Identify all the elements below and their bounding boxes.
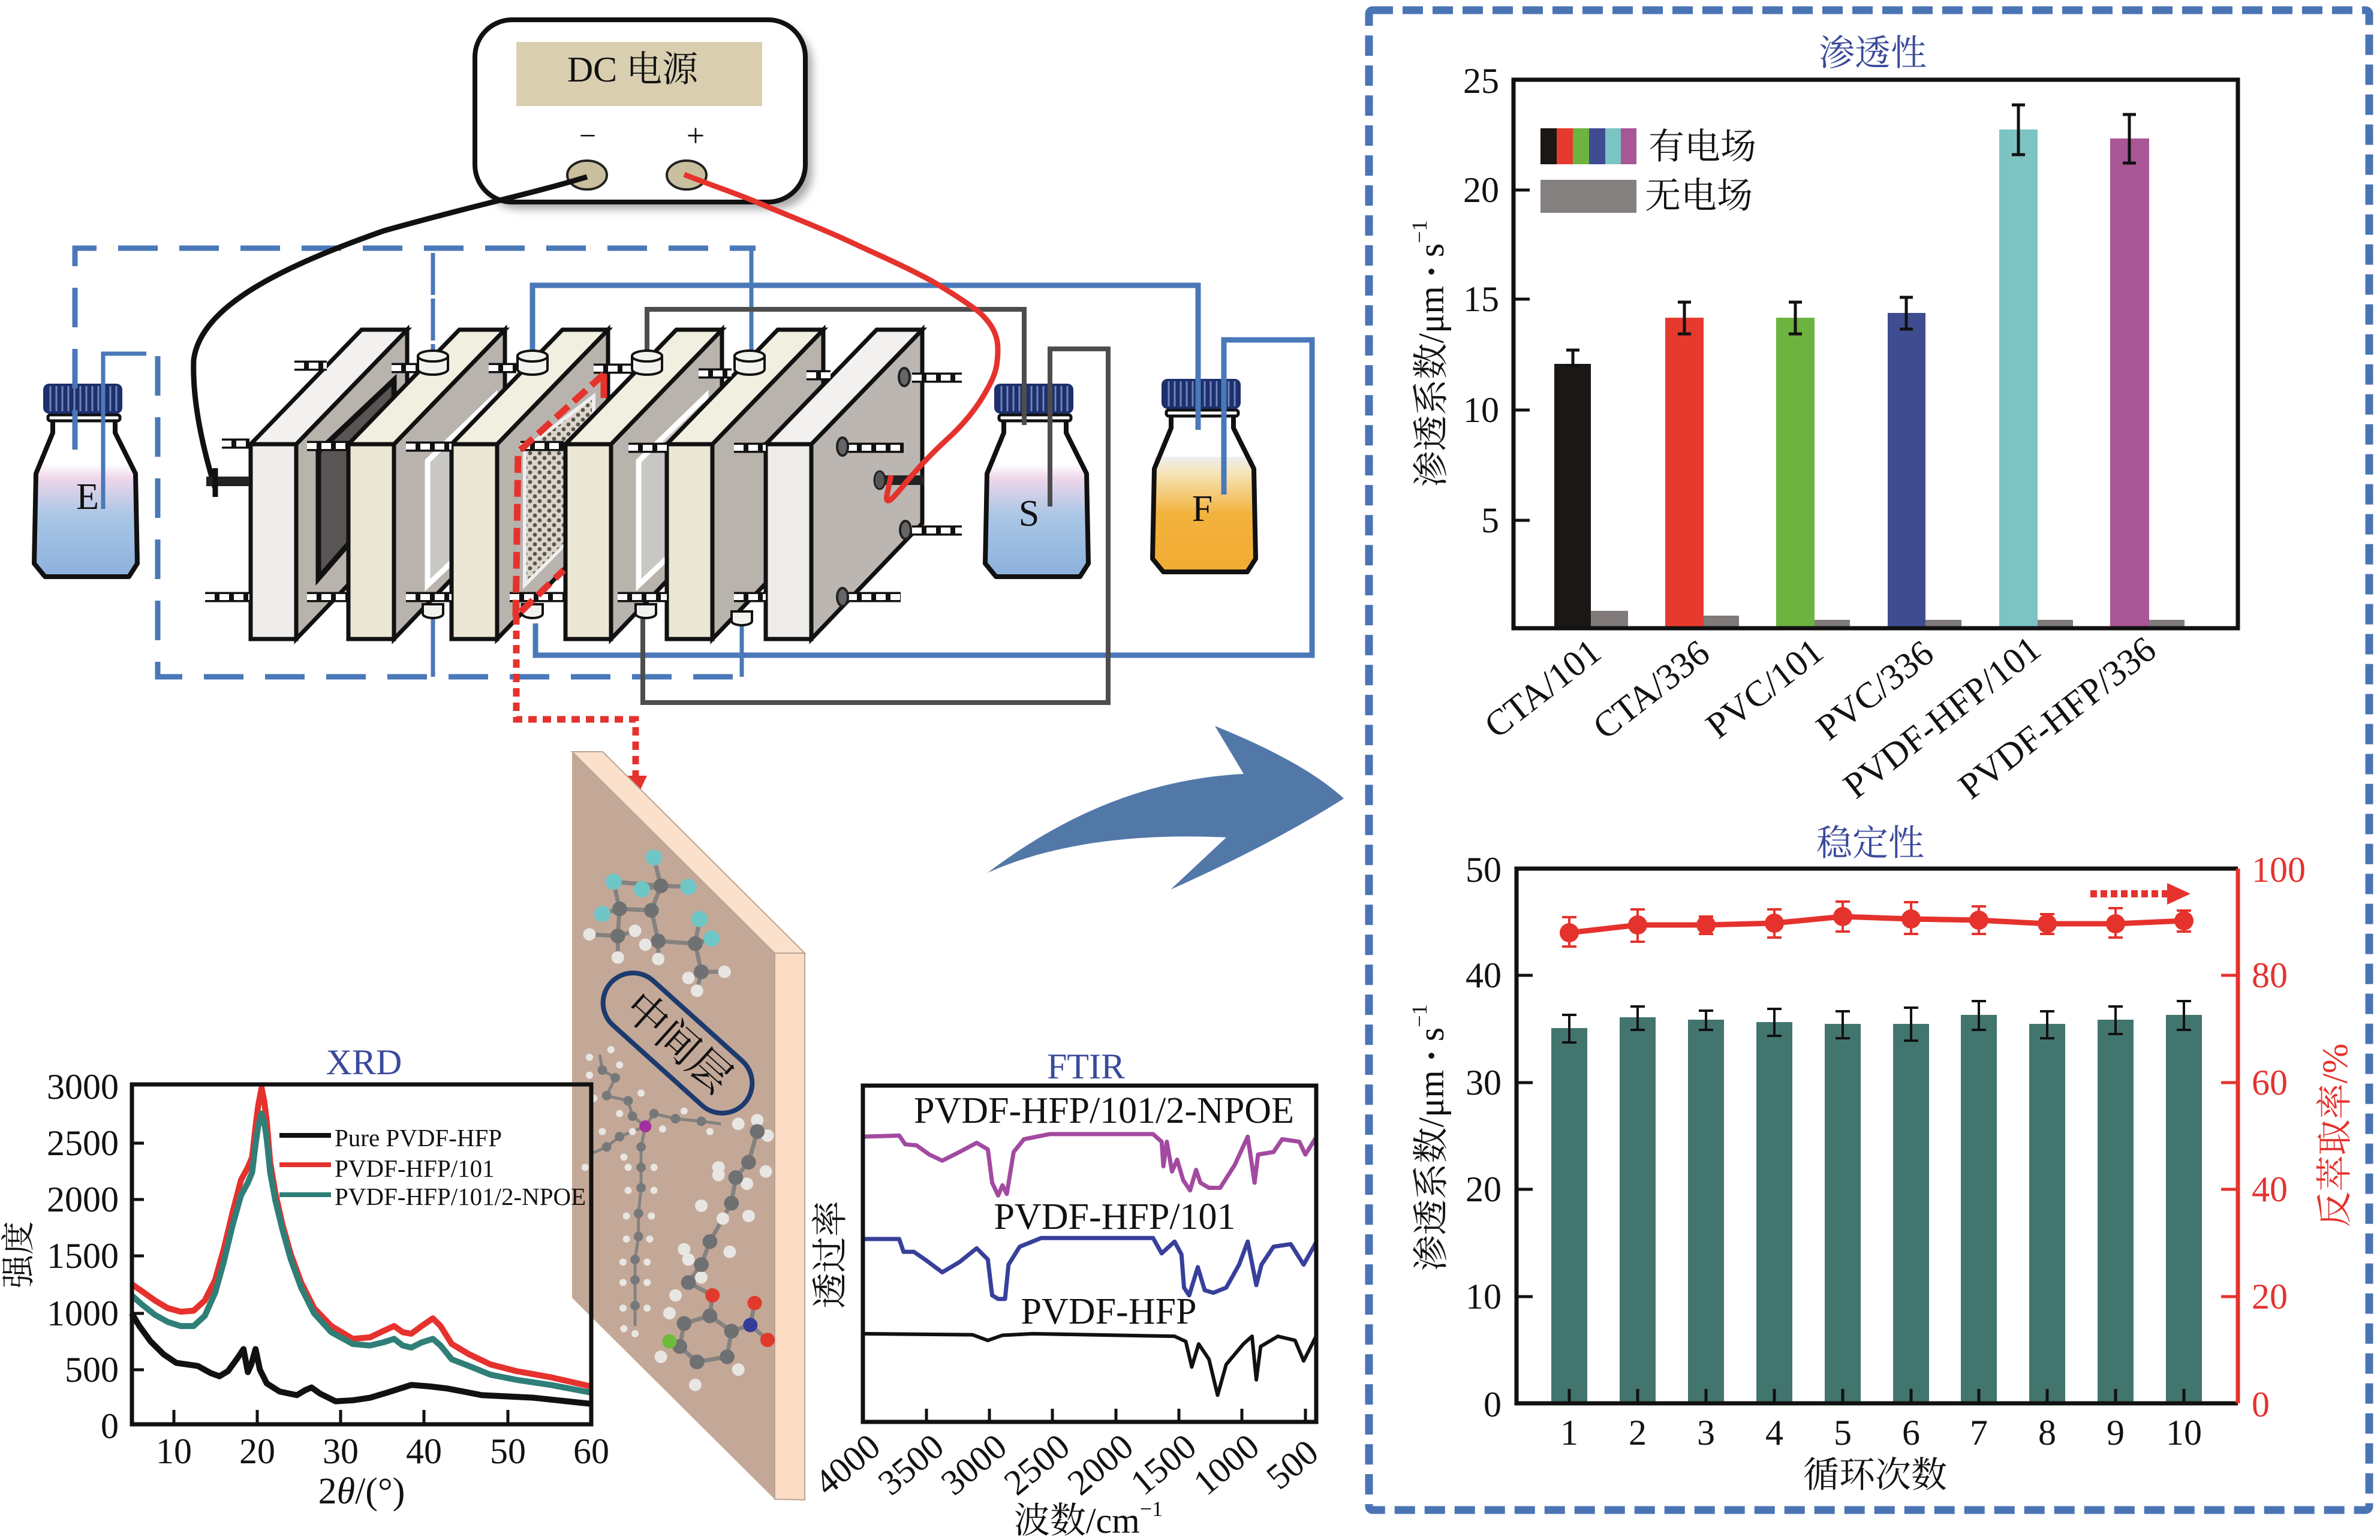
plate 4 xyxy=(565,330,722,639)
XRD x axis title: 2θ/(°) xyxy=(318,1471,405,1512)
x axis title: 循环次数 xyxy=(1803,1455,1947,1495)
XRD legend: PVDF-HFP/101 xyxy=(335,1155,495,1182)
permeability legend: 无电场 xyxy=(1645,176,1753,216)
stability title: 稳定性 xyxy=(1816,824,1924,863)
FTIR x axis title: −1 xyxy=(1140,1497,1163,1521)
XRD legend: Pure PVDF-HFP xyxy=(335,1124,502,1152)
molecule: PVDF-HFP xyxy=(583,849,731,997)
bolts xyxy=(205,366,962,597)
permeability x labels: PVC/101 xyxy=(1699,631,1831,746)
plate 1 xyxy=(251,330,407,639)
FTIR spectrum labels: PVDF-HFP/101/2-NPOE xyxy=(914,1090,1294,1131)
permeability legend xyxy=(1540,127,1756,216)
DC power supply: + xyxy=(687,117,705,153)
bottle E xyxy=(34,384,137,577)
FTIR spectrum labels: PVDF-HFP/101 xyxy=(994,1197,1236,1237)
x tick labels: 3 xyxy=(1697,1413,1715,1452)
XRD x tick labels: 60 xyxy=(573,1431,609,1471)
plate 6 xyxy=(766,330,922,639)
x tick labels: 8 xyxy=(2038,1413,2056,1452)
bottle F xyxy=(1153,379,1256,572)
FTIR x tick labels: 2000 xyxy=(1060,1426,1141,1503)
extraction line with markers xyxy=(1560,902,2194,947)
x tick labels: 5 xyxy=(1834,1413,1852,1452)
permeability x labels: CTA/101 xyxy=(1477,631,1609,746)
port connectors xyxy=(418,351,765,625)
x tick labels: 4 xyxy=(1765,1413,1783,1452)
right y tick labels: 0 xyxy=(2252,1385,2270,1424)
permeability y tick labels: 5 xyxy=(1481,501,1499,540)
XRD y axis title: 强度 xyxy=(1,1221,38,1288)
FTIR y axis title: 透过率 xyxy=(811,1201,850,1309)
bars without field xyxy=(1591,611,2185,628)
right y axis title: 反萃取率/% xyxy=(2315,1044,2355,1227)
FTIR x axis title: 波数/cm xyxy=(1014,1501,1140,1540)
x tick labels: 10 xyxy=(2166,1413,2202,1452)
FTIR x tick labels: 3000 xyxy=(934,1426,1014,1503)
FTIR spectrum labels xyxy=(914,1090,1294,1332)
XRD y tick labels: 1500 xyxy=(47,1236,119,1276)
XRD chart xyxy=(1,1042,609,1512)
permeability bars by cycle xyxy=(1551,1015,2202,1403)
permeability x labels: PVDF-HFP/101 xyxy=(1836,629,2048,806)
XRD x tick labels: 10 xyxy=(156,1431,192,1471)
FTIR axes xyxy=(863,1086,1316,1422)
FTIR x tick labels: 2500 xyxy=(997,1426,1077,1503)
permeability y tick labels: 15 xyxy=(1463,279,1499,319)
XRD y tick labels: 0 xyxy=(101,1406,119,1446)
x tick labels: 9 xyxy=(2107,1413,2125,1452)
FTIR spectra xyxy=(863,1134,1317,1395)
DC power supply: − xyxy=(579,119,596,152)
right y tick labels: 20 xyxy=(2252,1277,2288,1316)
FTIR chart xyxy=(807,1047,1326,1540)
permeability axes xyxy=(1514,80,2238,628)
big blue curved arrow xyxy=(988,726,1344,890)
error bars xyxy=(1566,105,2136,366)
FTIR x tick labels: 1500 xyxy=(1123,1426,1203,1503)
tubing: electrolyte dashed loop xyxy=(75,248,756,677)
XRD y tick labels: 500 xyxy=(65,1350,119,1390)
FTIR x tick labels: 3500 xyxy=(871,1426,951,1503)
FTIR x tick labels xyxy=(807,1426,1326,1503)
permeability x labels: CTA/336 xyxy=(1585,632,1717,748)
permeability x labels xyxy=(1477,629,2164,807)
tubing: feed solid loop xyxy=(532,285,1312,655)
left y tick labels: 10 xyxy=(1466,1277,1502,1316)
permeability bar chart xyxy=(1407,34,2238,807)
bolt heads xyxy=(837,368,911,606)
permeability title: 渗透性 xyxy=(1819,34,1927,73)
XRD curves xyxy=(132,1088,591,1404)
left y tick labels: 40 xyxy=(1466,956,1502,995)
red positive wire xyxy=(684,174,998,501)
XRD y tick labels xyxy=(47,1067,119,1446)
x tick labels: 1 xyxy=(1560,1413,1578,1452)
right y tick labels: 40 xyxy=(2252,1170,2288,1209)
plate 2 xyxy=(348,330,505,639)
XRD y tick labels: 3000 xyxy=(47,1067,119,1107)
permeability y tick labels xyxy=(1463,61,1499,540)
FTIR spectrum labels: PVDF-HFP xyxy=(1021,1291,1196,1332)
right y tick labels: 100 xyxy=(2252,850,2306,890)
XRD x tick labels: 50 xyxy=(490,1431,526,1471)
permeability y axis title: 渗透系数/μm·s xyxy=(1412,243,1451,487)
molecule: 2-NPOE xyxy=(655,1114,775,1391)
right dashed panel xyxy=(1369,10,2369,1510)
XRD x tick labels xyxy=(156,1431,609,1471)
x tick labels xyxy=(1560,1413,2202,1452)
right y tick labels: 60 xyxy=(2252,1063,2288,1102)
plate 3 with membrane xyxy=(452,330,608,639)
bars with field xyxy=(1554,129,2149,628)
left y tick labels: 30 xyxy=(1466,1063,1502,1102)
permeability legend: 有电场 xyxy=(1648,127,1756,167)
left diagram: membrane stack setup xyxy=(34,20,1312,798)
FTIR title: FTIR xyxy=(1047,1047,1125,1086)
membrane module stack xyxy=(205,330,962,639)
right y tick labels: 80 xyxy=(2252,956,2288,995)
molecule: ionic liquid carrier xyxy=(582,1046,721,1337)
red dashed outline around membrane xyxy=(516,374,604,617)
XRD y tick labels: 1000 xyxy=(47,1294,119,1333)
XRD y tick labels: 2000 xyxy=(47,1180,119,1219)
FTIR x tick labels: 500 xyxy=(1259,1432,1326,1497)
x tick labels: 2 xyxy=(1629,1413,1647,1452)
FTIR x tick labels: 1000 xyxy=(1186,1426,1266,1503)
bottle E: E xyxy=(76,477,99,517)
plate 5 xyxy=(667,330,823,639)
red dotted arrow to right axis xyxy=(2090,883,2191,905)
XRD legend xyxy=(279,1124,586,1210)
permeability y tick labels: 10 xyxy=(1463,390,1499,430)
permeability y tick labels: 25 xyxy=(1463,61,1499,101)
bottle S xyxy=(985,384,1088,577)
stability chart xyxy=(1407,824,2355,1495)
permeability y axis title: −1 xyxy=(1407,220,1431,243)
permeability x labels: PVC/336 xyxy=(1809,633,1941,748)
tubing: strip gray loop xyxy=(643,309,1108,703)
bar error bars xyxy=(1562,1001,2191,1042)
right y tick labels xyxy=(2252,850,2306,1424)
XRD title: XRD xyxy=(326,1042,402,1082)
permeability y tick labels: 20 xyxy=(1463,170,1499,210)
XRD x tick labels: 30 xyxy=(323,1431,359,1471)
interlayer panel xyxy=(572,752,805,1500)
FTIR x tick labels: 4000 xyxy=(807,1426,887,1503)
permeability x labels: PVDF-HFP/336 xyxy=(1951,629,2164,807)
left y tick labels: 50 xyxy=(1466,850,1502,890)
interlayer label: 中间层 xyxy=(615,984,740,1102)
x tick labels: 6 xyxy=(1902,1413,1920,1452)
XRD x tick labels: 40 xyxy=(406,1431,442,1471)
interlayer label xyxy=(591,960,765,1126)
bottle S: S xyxy=(1019,493,1039,534)
left y tick labels xyxy=(1466,850,1502,1424)
stability axes xyxy=(1517,869,2238,1403)
left y axis title: −1 xyxy=(1407,1004,1431,1027)
x tick labels: 7 xyxy=(1970,1413,1988,1452)
left y tick labels: 0 xyxy=(1484,1385,1502,1424)
XRD x tick labels: 20 xyxy=(239,1431,275,1471)
left y tick labels: 20 xyxy=(1466,1170,1502,1209)
red dotted callout arrow xyxy=(516,616,647,798)
left y axis title: 渗透系数/μm·s xyxy=(1412,1027,1451,1271)
XRD axes xyxy=(132,1084,591,1424)
DC power supply: DC 电源 xyxy=(567,50,699,89)
XRD y tick labels: 2500 xyxy=(47,1123,119,1163)
black negative wire xyxy=(194,177,587,497)
bottle F: F xyxy=(1192,489,1212,529)
XRD legend: PVDF-HFP/101/2-NPOE xyxy=(335,1183,586,1210)
DC power supply xyxy=(475,20,813,209)
